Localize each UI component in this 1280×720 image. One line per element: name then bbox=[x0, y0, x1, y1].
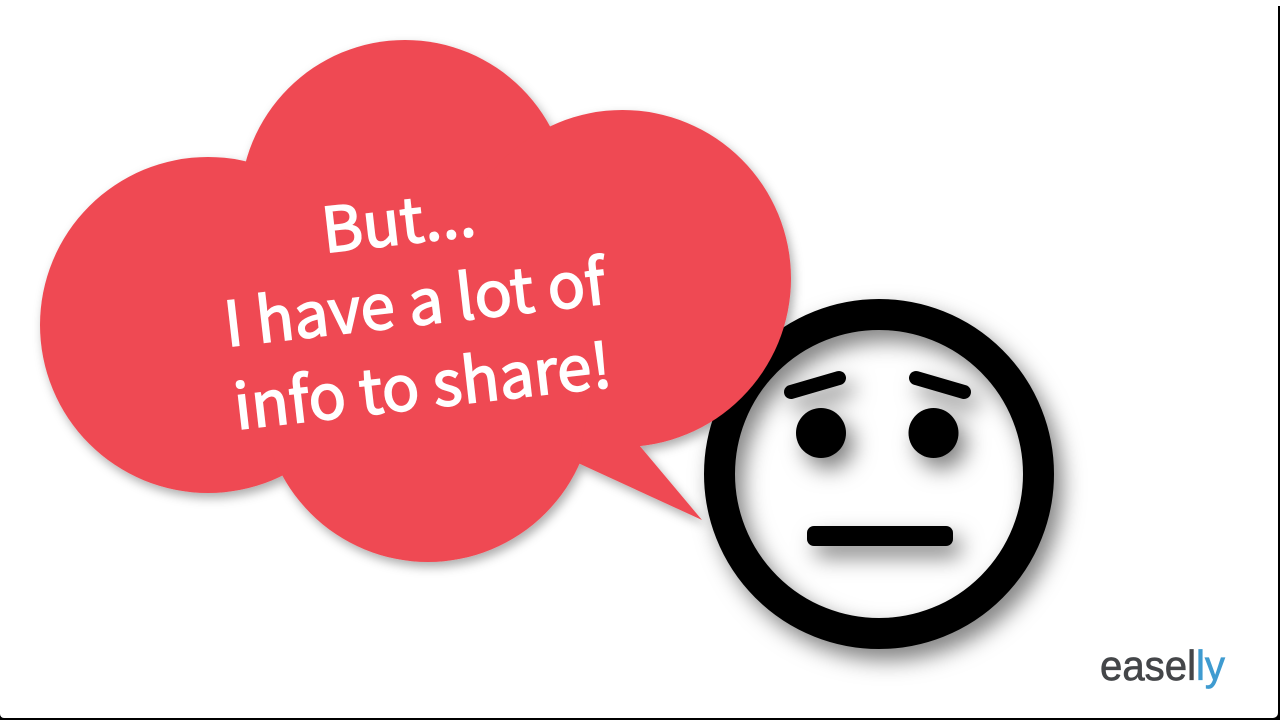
face outline bbox=[720, 314, 1038, 634]
line: But...: But... bbox=[316, 164, 479, 271]
logo: easelly: easelly bbox=[1100, 642, 1225, 689]
left eyebrow bbox=[791, 378, 839, 392]
right eye bbox=[908, 408, 958, 458]
speech bubble bbox=[40, 40, 791, 562]
icon: worried face bbox=[720, 314, 1038, 634]
line: info to share!: info to share! bbox=[229, 315, 615, 447]
bubble text bbox=[219, 164, 615, 447]
mouth bbox=[807, 526, 953, 546]
line: I have a lot of: I have a lot of bbox=[219, 231, 612, 365]
right eyebrow bbox=[916, 378, 964, 392]
left eye bbox=[796, 408, 846, 458]
bubble cloud shape bbox=[40, 40, 791, 562]
